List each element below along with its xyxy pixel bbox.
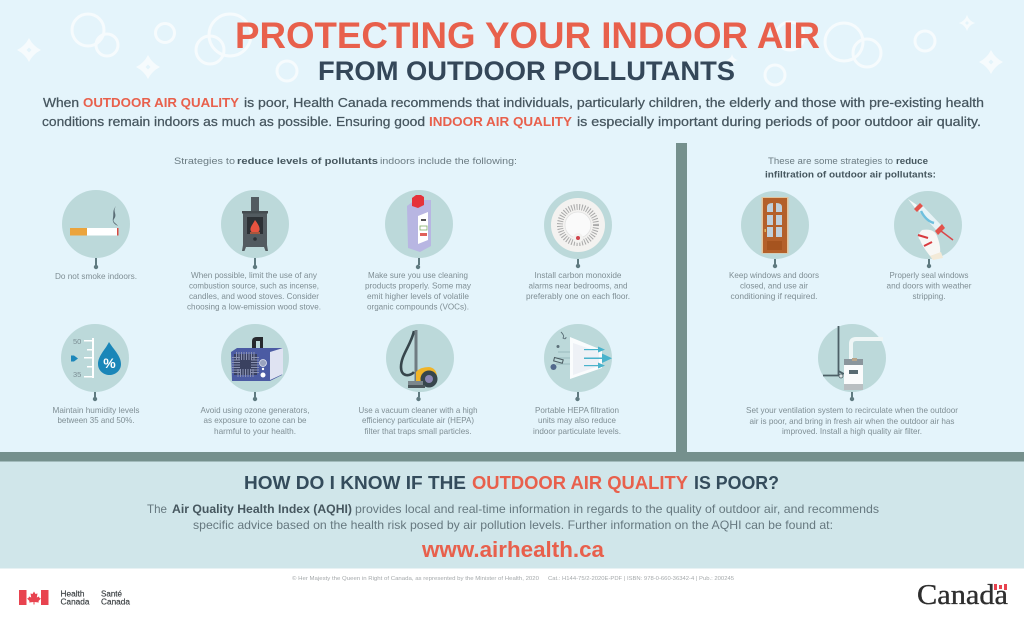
caption: products properly. Some may xyxy=(365,280,472,290)
icon: humidity scale and drop xyxy=(71,337,121,379)
panel: humidity xyxy=(52,324,140,425)
panel: door xyxy=(729,191,819,301)
caption: emit higher levels of volatile xyxy=(367,291,469,301)
caption: harmful to your health. xyxy=(214,426,296,436)
panel: wood stove xyxy=(187,190,321,312)
caption: Portable HEPA filtration xyxy=(535,405,619,415)
title: PROTECTING YOUR INDOOR AIR xyxy=(235,14,820,56)
caption xyxy=(187,270,321,312)
AQHI description: provides local and real-time information in regards to the quality of outdoor air, and recommends xyxy=(355,502,879,516)
icon: cigarette xyxy=(70,206,118,236)
title xyxy=(235,14,820,86)
vertical divider xyxy=(676,143,687,453)
intro text block: OUTDOOR AIR QUALITY xyxy=(83,95,239,110)
Health Canada flag logo: Canada xyxy=(101,598,131,606)
AQHI description xyxy=(147,502,879,532)
icon: alarm xyxy=(551,198,605,252)
AQHI description: Air Quality Health Index (AQHI) xyxy=(172,502,352,516)
panel: HEPA filtration xyxy=(533,324,621,436)
caption: filter that traps small particles. xyxy=(364,426,472,436)
caption: Install carbon monoxide xyxy=(534,270,622,280)
panel: ventilation system xyxy=(746,324,958,436)
intro text block xyxy=(42,95,984,129)
caption xyxy=(729,270,819,301)
caption: When possible, limit the use of any xyxy=(191,270,318,280)
panel: smoking xyxy=(55,190,137,281)
caption: Use a vacuum cleaner with a high xyxy=(358,405,478,415)
icon: wood stove xyxy=(242,197,268,251)
heading: infiltration strategies: These are some strategies to xyxy=(768,156,893,166)
panel: vacuum cleaner xyxy=(358,324,478,436)
AQHI description: The xyxy=(147,502,167,516)
caption xyxy=(746,405,958,436)
website url: www.airhealth.ca xyxy=(421,537,605,562)
caption: units may also reduce xyxy=(538,415,616,425)
caption: Make sure you use cleaning xyxy=(368,270,468,280)
caption: choosing a low-emission wood stove. xyxy=(187,302,321,312)
caption: Keep windows and doors xyxy=(729,270,819,280)
caption: combustion source, such as incense, xyxy=(189,280,319,290)
caption: stripping. xyxy=(912,291,946,301)
panel: carbon monoxide alarm xyxy=(526,191,630,301)
heading: infiltration strategies xyxy=(765,156,936,180)
icon: HEPA filter xyxy=(550,332,612,379)
caption: candles, and wood stoves. Consider xyxy=(189,291,319,301)
heading: infiltration strategies: infiltration of outdoor air pollutants: xyxy=(765,170,936,180)
icon: humidity scale and drop: % xyxy=(103,355,116,371)
caption xyxy=(886,270,972,301)
Health Canada flag logo: Santé xyxy=(101,590,122,598)
icon: furnace xyxy=(823,326,883,390)
heading: how do I know: IS POOR? xyxy=(694,472,779,493)
heading: how do I know: HOW DO I KNOW IF THE xyxy=(244,472,466,493)
heading: how do I know xyxy=(244,472,779,493)
caption: alarms near bedrooms, and xyxy=(528,280,628,290)
intro text block: is especially important during periods of poor outdoor air quality. xyxy=(577,114,981,129)
heading: indoor strategies: indoors include the following: xyxy=(380,156,517,166)
caption: improved. Install a high quality air filter. xyxy=(782,426,922,436)
caption xyxy=(533,405,621,436)
icon: humidity scale and drop: 35 xyxy=(73,370,81,379)
heading: indoor strategies: Strategies to xyxy=(174,156,235,166)
icon: humidity scale and drop: 50 xyxy=(73,337,81,346)
AQHI description: specific advice based on the health risk posed by air pollution levels. Further information on the AQHI can be found at: xyxy=(193,518,833,532)
caption xyxy=(200,405,310,436)
caption xyxy=(358,405,478,436)
Health Canada flag logo: Canada xyxy=(60,598,90,606)
horizontal divider xyxy=(0,452,1024,462)
heading: how do I know: OUTDOOR AIR QUALITY xyxy=(472,472,689,493)
caption xyxy=(526,270,630,301)
copyright: © Her Majesty the Queen in Right of Canada, as represented by the Minister of Health, 2020 xyxy=(292,575,539,582)
title: FROM OUTDOOR POLLUTANTS xyxy=(318,56,735,86)
caption: between 35 and 50%. xyxy=(58,415,134,425)
heading: indoor strategies xyxy=(174,156,517,166)
panel: caulking xyxy=(886,191,972,301)
caption: organic compounds (VOCs). xyxy=(367,302,469,312)
icon: vacuum xyxy=(401,330,438,388)
intro text block: INDOOR AIR QUALITY xyxy=(429,114,572,129)
heading: indoor strategies: reduce levels of pollutants xyxy=(237,156,378,166)
caption: as exposure to ozone can be xyxy=(204,415,307,425)
Health Canada flag logo: Health xyxy=(60,590,84,598)
caption xyxy=(365,270,472,312)
caption: conditioning if required. xyxy=(730,291,818,301)
caption xyxy=(52,405,140,425)
intro text block: is poor, Health Canada recommends that individuals, particularly children, the elderly and those with pre-existing health xyxy=(244,95,984,110)
caption: air is poor, and bring in fresh air when the outdoor air has xyxy=(750,416,954,426)
caption: Maintain humidity levels xyxy=(52,405,140,415)
caption: Set your ventilation system to recirculate when the outdoor xyxy=(746,405,958,415)
panel: cleaning products xyxy=(365,190,472,312)
panel: ozone generators xyxy=(200,324,310,436)
copyright xyxy=(292,575,734,582)
intro text block: When xyxy=(43,95,79,110)
icon: door xyxy=(762,197,788,254)
footer xyxy=(0,568,1024,622)
heading: infiltration strategies: reduce xyxy=(896,156,928,166)
caption: Properly seal windows xyxy=(890,270,968,280)
icon: ozone generator xyxy=(231,337,283,381)
caption: indoor particulate levels. xyxy=(533,426,621,436)
caption: efficiency particulate air (HEPA) xyxy=(362,415,474,425)
caption: Avoid using ozone generators, xyxy=(200,405,310,415)
Health Canada flag logo xyxy=(19,590,131,606)
caption: Do not smoke indoors. xyxy=(55,271,137,281)
Canada wordmark: Canada xyxy=(917,579,1008,611)
icon: cleaning bottle xyxy=(407,195,431,252)
caption: closed, and use air xyxy=(740,280,808,290)
copyright: Cat.: H144-75/2-2020E-PDF | ISBN: 978-0-660-36342-4 | Pub.: 200245 xyxy=(548,576,734,582)
caption: and doors with weather xyxy=(886,280,972,290)
panel: how do I know band xyxy=(0,462,1024,568)
icon: caulking gun xyxy=(908,199,953,260)
intro text block: conditions remain indoors as much as possible. Ensuring good xyxy=(42,114,425,129)
caption: preferably one on each floor. xyxy=(526,291,630,301)
